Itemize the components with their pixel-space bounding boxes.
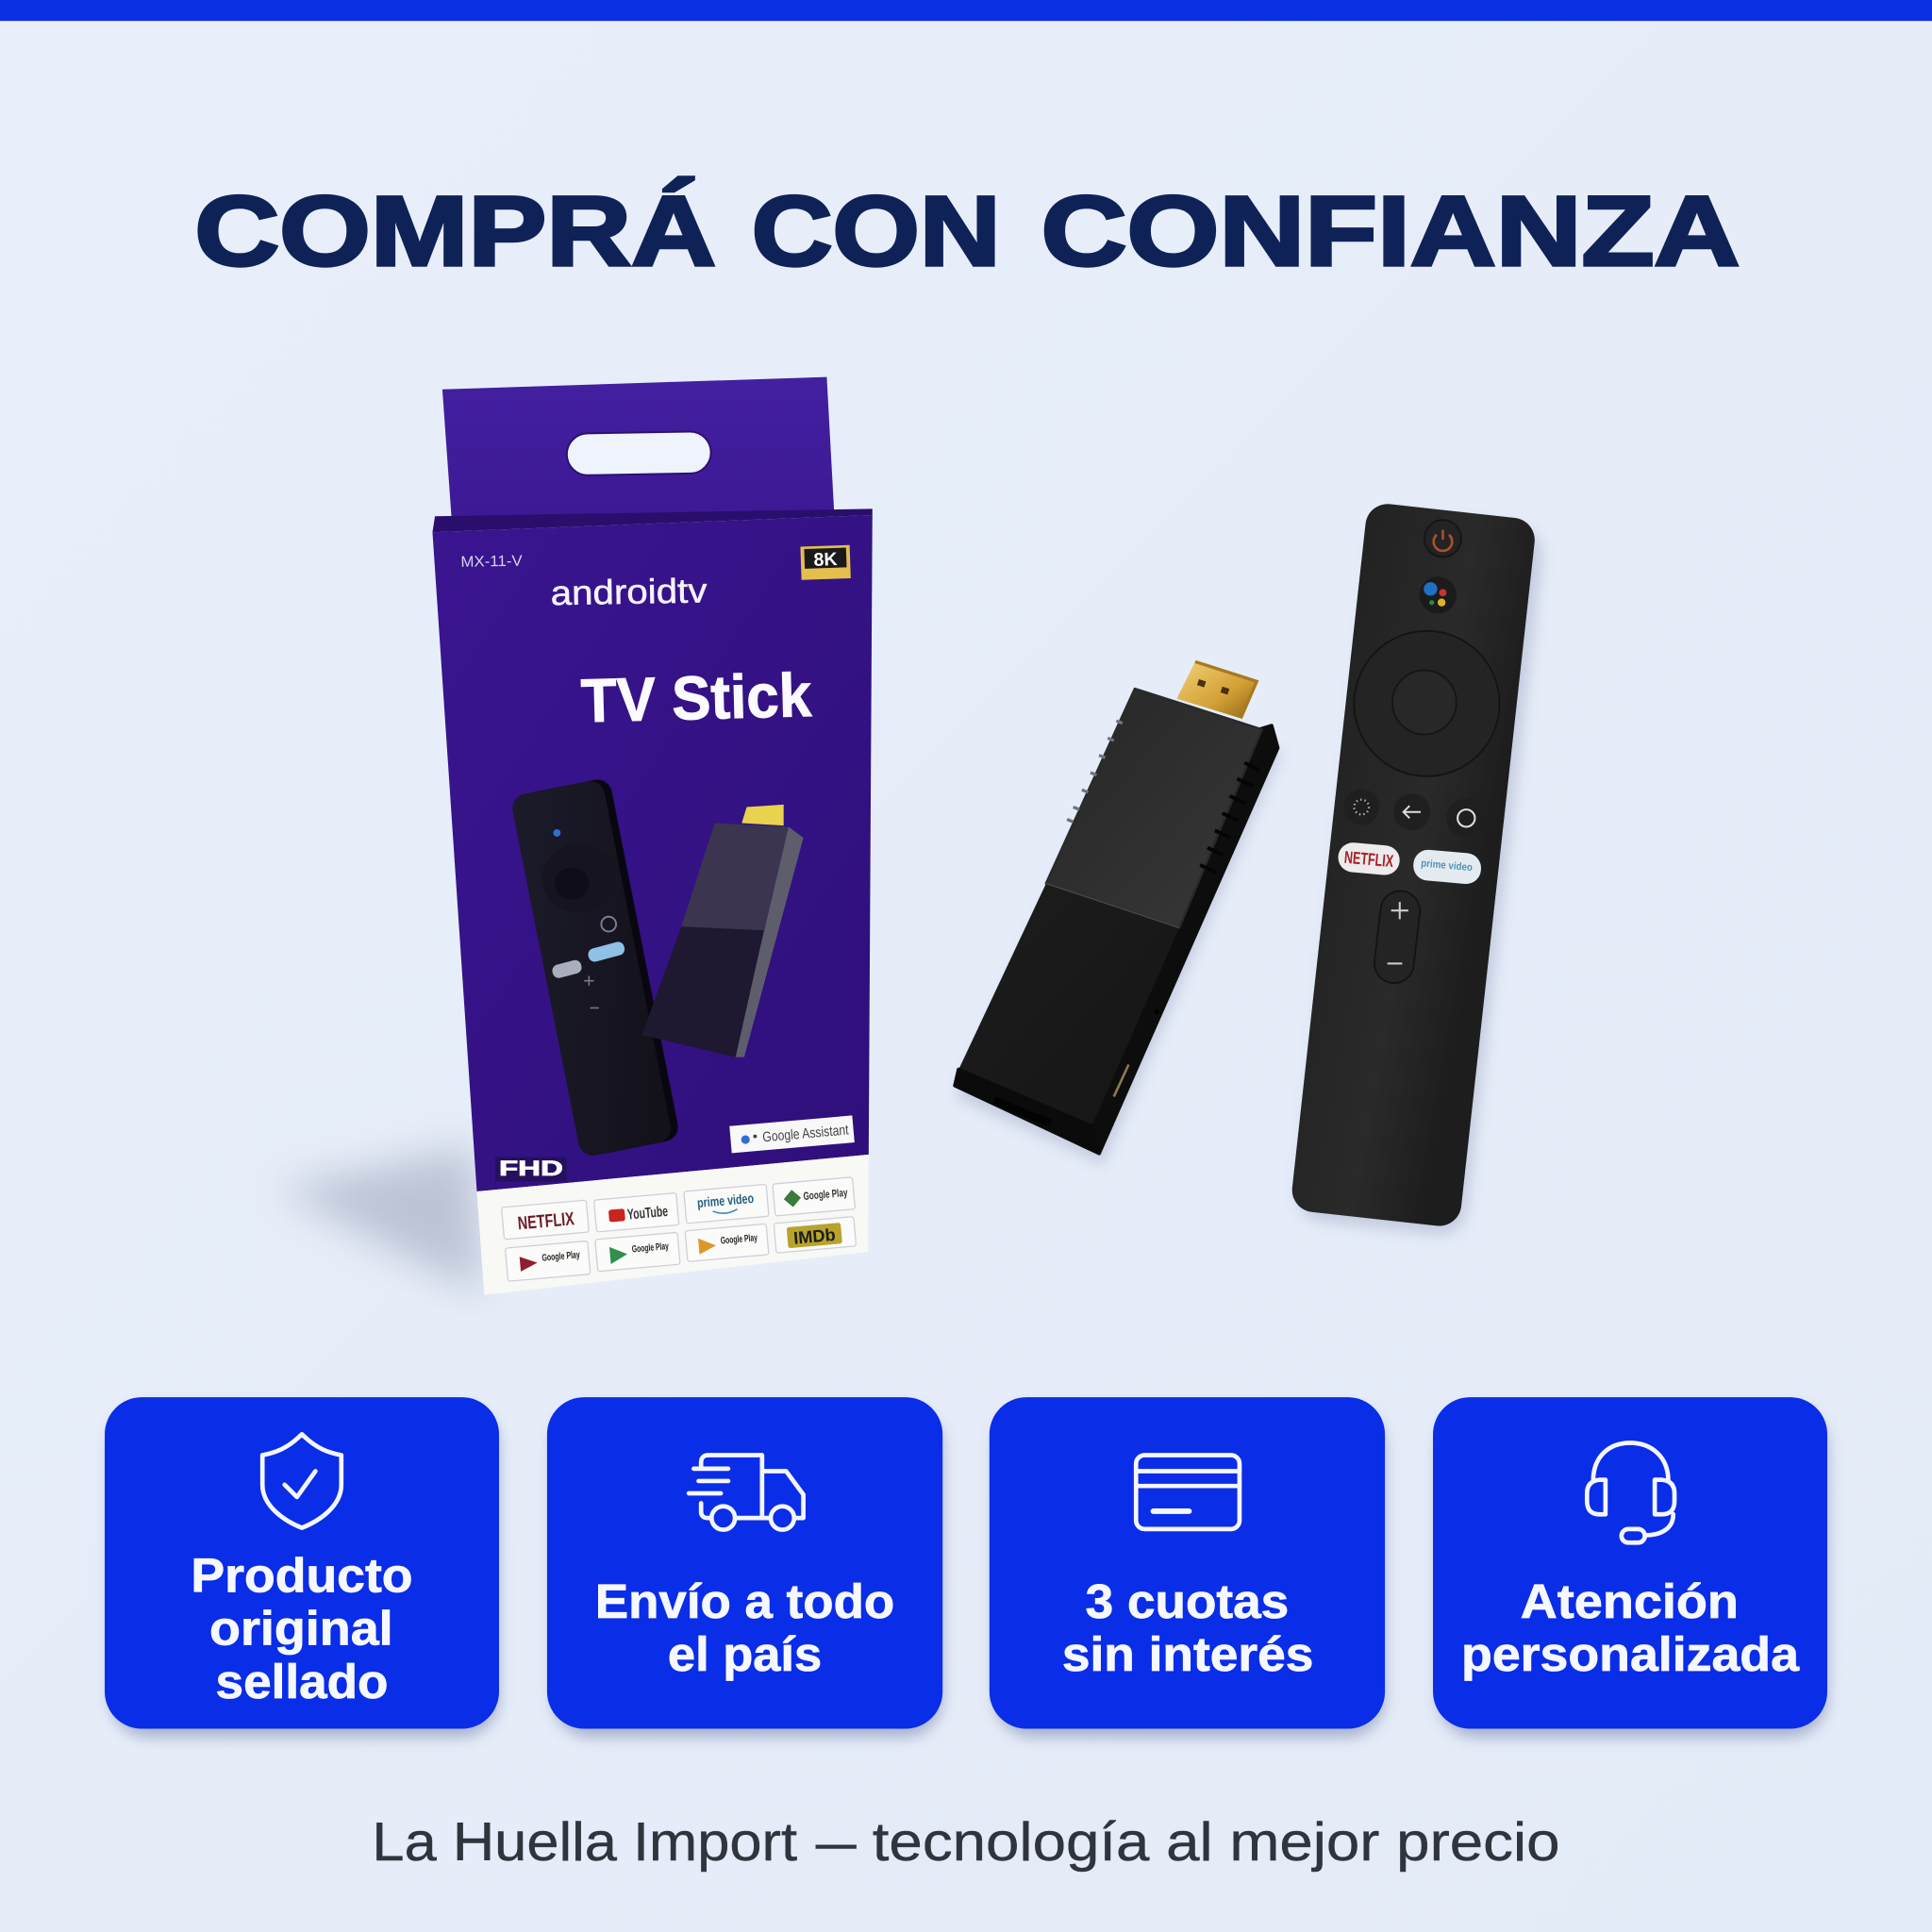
tile: Play Movies: Google Play: [541, 1250, 580, 1264]
FHD label: [495, 1157, 567, 1182]
box remote image: [510, 777, 680, 1158]
tile: IMDb: IMDb: [792, 1224, 837, 1248]
assistant button: [1420, 576, 1457, 613]
icon: credit card: [1136, 1456, 1240, 1529]
box front face: [432, 515, 873, 1191]
card text: el país: [668, 1627, 822, 1681]
title: CONFIANZA: [1041, 176, 1740, 287]
card text: [1461, 1574, 1800, 1681]
model label: MX-11-V: [460, 553, 523, 571]
card text: [191, 1549, 413, 1708]
Google Assistant tag: [729, 1115, 855, 1153]
stick soft shadow: [955, 702, 1281, 1164]
footer tagline: La Huella Import: [372, 1812, 797, 1873]
8K badge: [800, 545, 851, 580]
top accent bar: [0, 0, 1932, 21]
card text: [1062, 1574, 1313, 1681]
home button: [1446, 798, 1486, 838]
Netflix button: NETFLIX: [1343, 847, 1395, 871]
prime video button: prime video: [1421, 858, 1474, 874]
flap hang hole: [566, 431, 711, 475]
feature cards row: [105, 1397, 1827, 1738]
tile: IMDb: [774, 1217, 857, 1253]
volume rocker: [1373, 889, 1422, 985]
panel: atencion: [1433, 1397, 1827, 1738]
box hang flap: [442, 377, 834, 527]
androidtv logo: androidtv: [550, 571, 708, 612]
prime video button: [1412, 849, 1482, 885]
TV Stick heading: TV Stick: [580, 660, 813, 735]
title: [194, 176, 1740, 287]
card text: sin interés: [1062, 1627, 1313, 1681]
tile: Google Play: [773, 1177, 855, 1216]
tile: prime video: prime video: [696, 1191, 755, 1211]
footer tagline: [372, 1812, 1560, 1873]
remote soft shadow: [1294, 511, 1545, 1238]
Netflix button: [1337, 841, 1401, 876]
stick side face: [1090, 725, 1277, 1154]
power button: [1424, 520, 1461, 557]
tile: Play Music: [685, 1224, 769, 1261]
card text: 3 cuotas: [1086, 1574, 1289, 1628]
gold HDMI connector: [1176, 661, 1257, 718]
pin hole: [1155, 1009, 1159, 1014]
tile: Google Play: Google Play: [803, 1187, 848, 1203]
stick upper body: [1046, 689, 1261, 928]
tile: YouTube: YouTube: [626, 1204, 669, 1224]
title: COMPRÁ: [194, 176, 716, 287]
tile: Play Music: Google Play: [720, 1233, 758, 1247]
USB port: [1114, 1064, 1128, 1096]
card text: Envío a todo: [595, 1574, 894, 1628]
tile: Play Games: Google Play: [631, 1241, 669, 1256]
FHD label: FHD: [499, 1157, 563, 1180]
icon: delivery truck: [689, 1456, 804, 1530]
remote control: [1290, 502, 1545, 1238]
card text: Producto: [191, 1549, 413, 1603]
box white strip: [476, 1155, 869, 1295]
card text: sellado: [216, 1655, 388, 1708]
panel: cuotas: [990, 1397, 1385, 1738]
back button: [1393, 793, 1430, 830]
panel: envio: [547, 1397, 942, 1738]
box cast shadow: [277, 1146, 483, 1293]
mic button: [1343, 790, 1379, 824]
Google Assistant tag: Google Assistant: [762, 1122, 850, 1145]
card text: personalizada: [1461, 1627, 1800, 1681]
box fold: [432, 508, 873, 532]
tile: Play Movies: [506, 1241, 591, 1281]
HDMI stick: [955, 661, 1281, 1164]
8K badge: 8K: [813, 549, 838, 571]
streaming app tiles: [502, 1177, 857, 1281]
card text: original: [209, 1602, 393, 1656]
box stick image: [641, 805, 804, 1058]
icon: shield check: [262, 1434, 341, 1528]
footer tagline: —: [816, 1812, 857, 1873]
right vent ridges: [1200, 762, 1259, 873]
product box: [277, 377, 873, 1295]
footer tagline: tecnología al mejor precio: [873, 1812, 1560, 1873]
stick seam: [1046, 883, 1179, 928]
stick lower body: [958, 883, 1179, 1126]
card text: Atención: [1521, 1574, 1739, 1628]
tile: YouTube: [594, 1193, 679, 1232]
title: CON: [752, 176, 1001, 287]
d-pad ring: [1354, 631, 1500, 776]
card text: [595, 1574, 894, 1681]
tile: Netflix: [502, 1200, 589, 1240]
panel: producto original: [105, 1397, 499, 1738]
tile: Play Games: [595, 1232, 680, 1272]
tile: prime video: [684, 1184, 769, 1224]
HDMI port end: [993, 1096, 1052, 1127]
left vent notches: [1067, 721, 1123, 822]
stick bottom face: [955, 1070, 1099, 1154]
remote body: [1290, 502, 1537, 1228]
icon: headset: [1587, 1442, 1674, 1542]
tile: Netflix: NETFLIX: [517, 1208, 575, 1234]
